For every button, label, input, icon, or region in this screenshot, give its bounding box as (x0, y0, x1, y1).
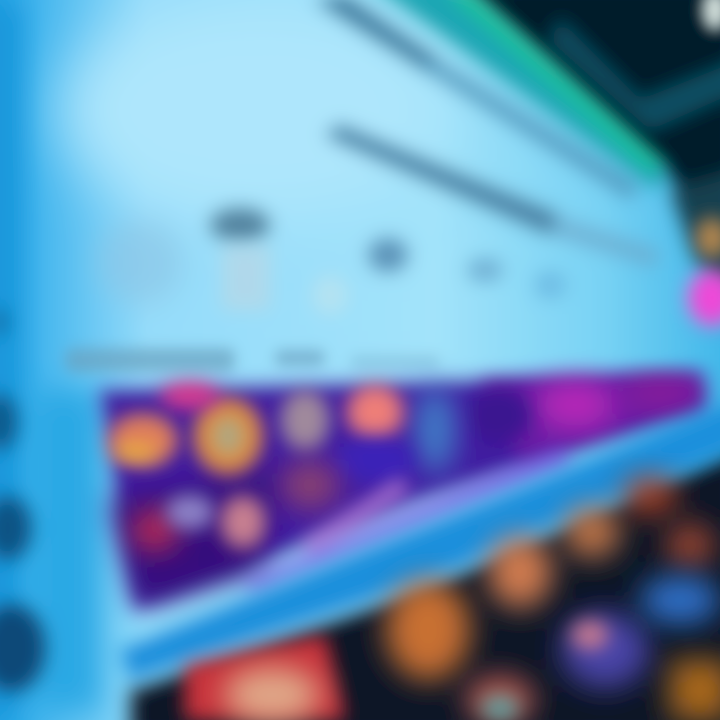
top right dark area (455, 0, 720, 300)
product tiles (185, 475, 720, 720)
right edge neon accents (688, 0, 720, 326)
heading smudges (315, 0, 660, 268)
green strip (365, 0, 668, 190)
blue diagonal strip (120, 400, 720, 680)
left edge dark circles (0, 308, 46, 692)
colourful panel (100, 375, 705, 610)
chart smudges (98, 208, 566, 315)
lower dark tray (130, 450, 720, 720)
label row above panel (65, 348, 440, 372)
